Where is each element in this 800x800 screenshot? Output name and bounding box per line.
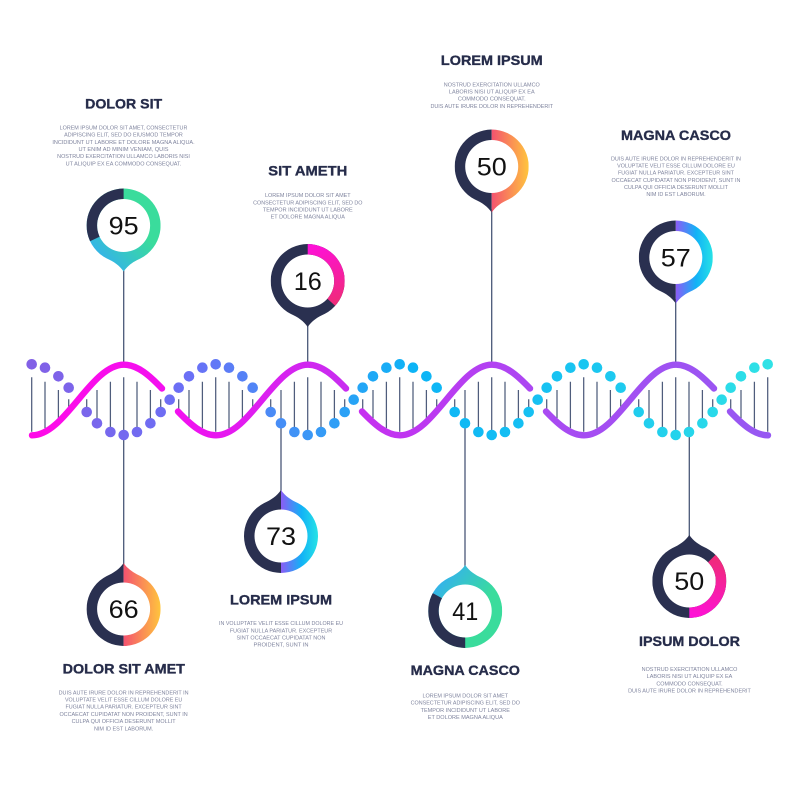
panel: magna casco 41: [410, 565, 520, 720]
text block: [611, 157, 741, 198]
panel: lorem ipsum 50: [430, 55, 553, 212]
text block: [430, 82, 554, 110]
text block: NIM ID EST LABORUM.: [646, 192, 706, 198]
heading: LOREM IPSUM: [230, 591, 332, 607]
text block: OCCAECAT CUPIDATAT NON PROIDENT, SUNT IN: [59, 712, 188, 718]
text block: OCCAECAT CUPIDATAT NON PROIDENT, SUNT IN: [612, 178, 741, 184]
text block: LABORIS NISI UT ALIQUIP EX EA: [647, 674, 733, 680]
heading: SIT AMETH: [268, 163, 347, 179]
text block: LOREM IPSUM DOLOR SIT AMET, CONSECTETUR: [60, 126, 187, 132]
text block: TEMPOR INCIDIDUNT UT LABORE: [421, 708, 510, 714]
donut pin: 95: 95: [109, 212, 139, 240]
text block: VOLUPTATE VELIT ESSE CILLUM DOLORE EU: [617, 164, 735, 170]
text block: ADIPISCING ELIT, SED DO EIUSMOD TEMPOR: [64, 133, 183, 139]
donut pin: 50: 50: [477, 154, 507, 182]
text block: DUIS AUTE IRURE DOLOR IN REPREHENDERIT: [628, 688, 751, 694]
DNA helix: [26, 359, 773, 440]
donut pin: 50: [652, 535, 726, 618]
donut pin: 50: [454, 130, 529, 212]
text block: LOREM IPSUM DOLOR SIT AMET: [265, 193, 351, 199]
text block: LABORIS NISI UT ALIQUIP EX EA: [449, 90, 535, 96]
connector lines from pins to helix: [124, 209, 689, 568]
text block: INCIDIDUNT UT LABORE ET DOLORE MAGNA ALIQUA.: [52, 140, 195, 146]
heading: IPSUM DOLOR: [639, 633, 740, 649]
donut pin: 16: [270, 244, 345, 327]
donut pin: 66: [86, 563, 160, 646]
text block: NOSTRUD EXERCITATION ULLAMCO: [444, 82, 541, 88]
text block: CULPA QUI OFFICIA DESERUNT MOLLIT: [624, 185, 729, 191]
panel: sit ameth 16: [253, 166, 362, 327]
text block: [411, 694, 521, 721]
text block: VOLUPTATE VELIT ESSE CILLUM DOLORE EU: [65, 698, 182, 704]
text block: DUIS AUTE IRURE DOLOR IN REPREHENDERIT IN: [59, 691, 189, 697]
text block: FUGIAT NULLA PARIATUR. EXCEPTEUR: [230, 628, 332, 634]
donut pin: 95: [86, 188, 160, 272]
donut pin: 16: 16: [294, 268, 322, 296]
donut pin: 41: 41: [452, 598, 478, 626]
text block: [253, 193, 363, 220]
panel: lorem ipsum 73: [219, 476, 343, 649]
text block: ET DOLORE MAGNA ALIQUA: [428, 715, 503, 721]
heading: MAGNA CASCO: [411, 662, 520, 678]
text block: NIM ID EST LABORUM.: [94, 726, 154, 732]
heading: DOLOR SIT: [85, 95, 163, 111]
donut pin: 50: 50: [674, 568, 704, 596]
text block: UT ALIQUIP EX EA COMMODO CONSEQUAT.: [66, 161, 182, 167]
donut pin: 73: [244, 490, 318, 573]
text block: [59, 691, 189, 732]
donut pin: 73: 73: [266, 523, 296, 551]
text block: NOSTRUD EXERCITATION ULLAMCO LABORIS NISI: [57, 154, 190, 160]
text block: PROIDENT, SUNT IN: [254, 643, 309, 649]
donut pin: 57: [638, 220, 713, 304]
helix strand: [32, 365, 768, 435]
donut pin: 57: 57: [661, 244, 691, 272]
text block: TEMPOR INCIDIDUNT UT LABORE: [263, 207, 353, 213]
text block: [219, 621, 343, 649]
panel: dolor sit 95: [52, 95, 195, 286]
text block: ET DOLORE MAGNA ALIQUA: [271, 214, 345, 220]
donut pin: 41: [428, 565, 502, 648]
text block: UT ENIM AD MINIM VENIAM, QUIS: [78, 147, 169, 153]
text block: CULPA QUI OFFICIA DESERUNT MOLLIT: [72, 719, 176, 725]
text block: FUGIAT NULLA PARIATUR. EXCEPTEUR SINT: [65, 705, 182, 711]
text block: CONSECTETUR ADIPISCING ELIT, SED DO: [411, 701, 521, 707]
panel: magna casco 57: [611, 127, 741, 318]
panel: ipsum dolor 50: [628, 521, 751, 694]
text block: DUIS AUTE IRURE DOLOR IN REPREHENDERIT IN: [611, 157, 741, 163]
panel: dolor sit amet 66: [59, 549, 189, 732]
text block: IN VOLUPTATE VELIT ESSE CILLUM DOLORE EU: [219, 621, 343, 627]
heading: DOLOR SIT AMET: [63, 660, 185, 676]
text block: CONSECTETUR ADIPISCING ELIT, SED DO: [253, 200, 363, 206]
text block: [628, 667, 751, 694]
text block: FUGIAT NULLA PARIATUR. EXCEPTEUR SINT: [618, 171, 735, 177]
text block: COMMODO CONSEQUAT.: [656, 681, 723, 687]
helix dots: [26, 359, 773, 440]
text block: [52, 126, 195, 167]
heading: MAGNA CASCO: [621, 127, 731, 143]
text block: LOREM IPSUM DOLOR SIT AMET: [422, 694, 509, 700]
heading: LOREM IPSUM: [441, 52, 543, 68]
text block: COMMODO CONSEQUAT.: [458, 97, 526, 103]
text block: NOSTRUD EXERCITATION ULLAMCO: [642, 667, 738, 673]
helix rungs: [32, 377, 768, 435]
text block: DUIS AUTE IRURE DOLOR IN REPREHENDERIT: [430, 104, 554, 110]
text block: SINT OCCAECAT CUPIDATAT NON: [236, 635, 326, 641]
donut pin: 66: 66: [109, 596, 139, 624]
